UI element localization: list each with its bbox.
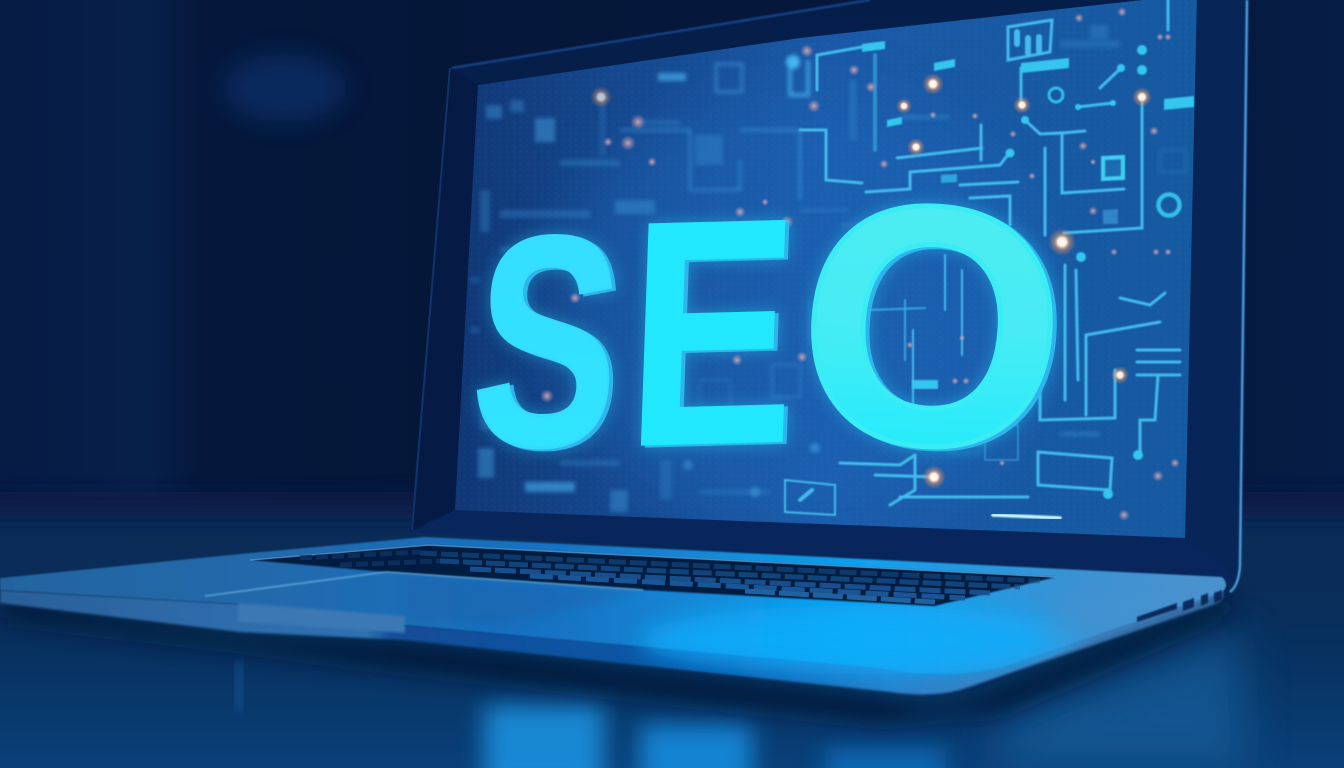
side ports — [1137, 590, 1222, 622]
letter E: E — [623, 151, 802, 513]
small pink nodes — [540, 7, 1180, 521]
base front edge — [0, 590, 1224, 695]
ring icons — [1049, 88, 1180, 216]
blurred left circuit details — [470, 25, 1186, 512]
letter O: O — [787, 128, 1077, 525]
glowing white nodes — [590, 73, 1152, 489]
cyan bars and solid shapes — [862, 41, 1194, 499]
keyboard — [250, 545, 1056, 606]
letter S: S — [464, 175, 631, 509]
laptop base — [0, 537, 1226, 695]
shadow under laptop — [0, 596, 1230, 722]
micro circuit texture — [440, 0, 1210, 550]
table surface — [0, 492, 1344, 768]
deck glow — [640, 606, 1080, 674]
screen background — [440, 0, 1210, 550]
screen — [440, 0, 1210, 550]
front notch — [238, 603, 405, 633]
table reflections — [236, 630, 1245, 768]
SEO lettering — [470, 196, 1063, 460]
sharp right circuit traces — [785, 0, 1180, 515]
bright bar — [993, 515, 1060, 518]
laptop lid — [410, 0, 1250, 592]
trackpad seam — [205, 572, 643, 596]
base top deck — [0, 537, 1226, 674]
bar chart box — [1008, 20, 1052, 60]
